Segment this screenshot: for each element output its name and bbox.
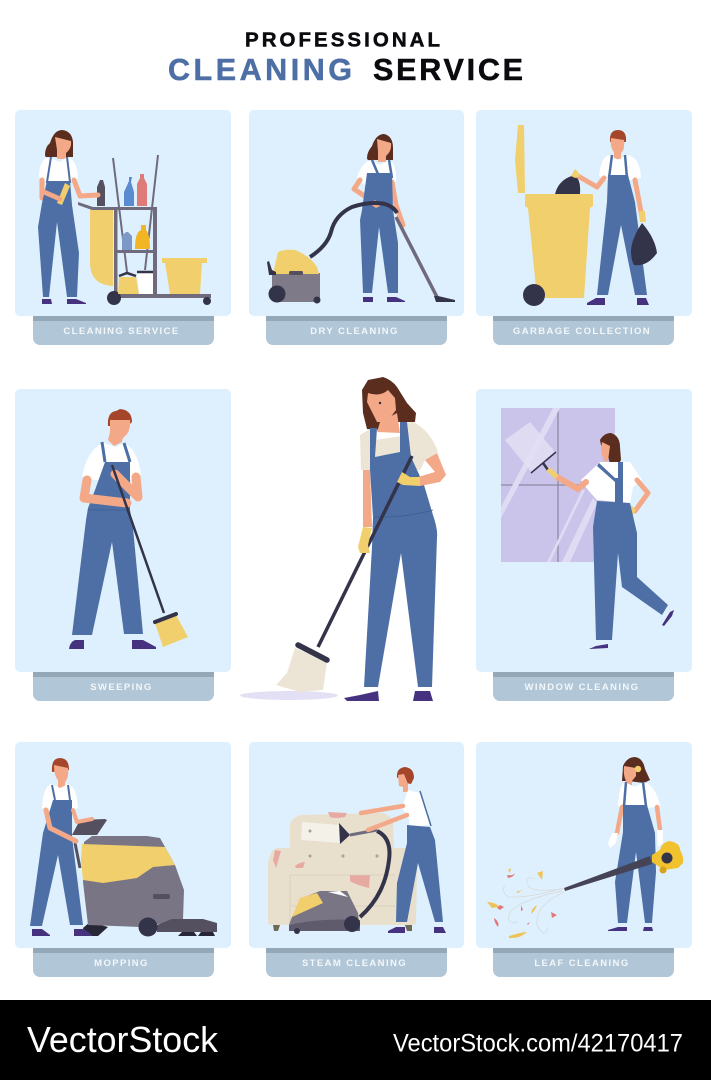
title: SERVICE — [373, 53, 523, 87]
title: CLEANING — [168, 53, 352, 87]
illustration: floor scrubber machine — [72, 819, 217, 936]
footer: VectorStock banner: VectorStock.com/42170417 — [393, 1030, 683, 1058]
panel: sweeping — [15, 389, 231, 701]
illustration: yellow bin — [515, 125, 593, 306]
illustration: window — [501, 408, 615, 562]
illustration: woman with blower — [564, 757, 683, 931]
illustration: vacuum cleaner — [267, 203, 397, 304]
illustration: woman with bottle — [38, 130, 98, 304]
illustration: cleaning cart — [78, 155, 211, 305]
title — [168, 28, 523, 87]
illustration: stained armchair — [268, 812, 417, 931]
panel: window cleaning: WINDOW CLEANING — [525, 682, 639, 693]
panel: sweeping: SWEEPING — [90, 682, 153, 693]
panel: cleaning service — [15, 110, 231, 345]
panel: dry cleaning: DRY CLEANING — [310, 326, 399, 337]
panel: mopping — [15, 742, 231, 977]
panel: leaf cleaning: LEAF CLEANING — [534, 958, 630, 969]
panel: cleaning service: CLEANING SERVICE — [63, 326, 180, 337]
illustration: man with garbage bag — [571, 130, 657, 305]
panel: mopping: MOPPING — [94, 958, 149, 969]
illustration: man sweeping — [69, 409, 188, 649]
illustration: blown leaves — [487, 868, 564, 938]
illustration: woman vacuuming — [354, 134, 455, 302]
footer: VectorStock banner — [0, 1000, 711, 1080]
illustration: man steam cleaning — [361, 767, 446, 933]
panel: steam cleaning — [249, 742, 464, 977]
panel: steam cleaning: STEAM CLEANING — [302, 958, 407, 969]
illustration: man at scrubber — [30, 758, 92, 936]
footer: VectorStock banner: VectorStock — [27, 1019, 219, 1060]
panel: dry cleaning — [249, 110, 464, 345]
illustration: steam cleaner — [289, 823, 390, 934]
panel: leaf cleaning — [476, 742, 692, 977]
panel: window cleaning — [476, 389, 692, 701]
title: PROFESSIONAL — [245, 28, 440, 52]
panel: garbage collection — [476, 110, 692, 345]
illustration: woman cleaning window — [531, 433, 674, 649]
illustration: central woman with mop — [240, 377, 446, 701]
panel: garbage collection: GARBAGE COLLECTION — [513, 326, 651, 337]
